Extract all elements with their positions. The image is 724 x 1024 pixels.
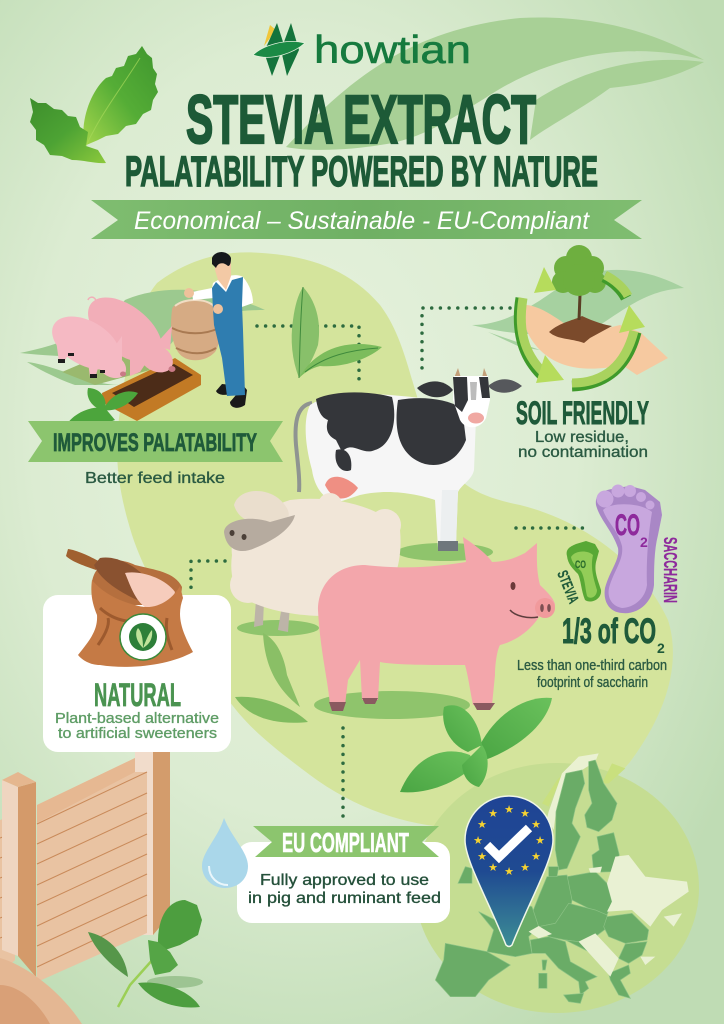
mound — [0, 958, 82, 1024]
ribbon: EU compliant — [253, 826, 439, 858]
sheep eyes — [230, 530, 247, 540]
stevia leaves top left — [30, 46, 158, 163]
sheep head — [224, 515, 295, 551]
text: natural: Plant-based alternative — [55, 710, 219, 727]
leaf behind hand — [472, 270, 684, 350]
trough — [102, 358, 201, 421]
heading: natural: NATURAL — [94, 677, 181, 713]
large footprint: saccharin: CO — [615, 509, 640, 542]
text: EU compliant — [248, 872, 441, 907]
cow udder — [325, 477, 358, 499]
eu stars: ★ — [473, 834, 483, 847]
text: soil friendly: Low residue, — [535, 429, 629, 446]
dotted connector: pig to EU compliant — [341, 728, 345, 818]
dotted connector: natural to sheep — [191, 561, 225, 590]
pig hooves — [329, 698, 495, 711]
cow front leg — [440, 490, 458, 547]
text: soil friendly: no contamination — [518, 444, 648, 461]
ground shadow: cow — [397, 543, 493, 561]
ribbon: tagline: Economical – Sustainable - EU-Compliant — [134, 207, 590, 235]
text: EU compliant: Fully approved to use — [260, 872, 429, 889]
text: better feed intake: Better feed intake — [85, 470, 225, 487]
pig large — [76, 285, 178, 378]
sheep body — [230, 493, 401, 616]
text: carbon footprint: Less than one-third carbon — [517, 658, 667, 674]
ribbon: improves palatability: IMPROVES PALATABILITY — [53, 429, 257, 457]
ground under pigs — [62, 345, 150, 385]
sack back rim — [92, 560, 182, 605]
cow body — [306, 394, 476, 548]
plank lines — [0, 772, 147, 967]
text: natural — [55, 710, 219, 742]
ribbon: EU compliant: EU COMPLIANT — [282, 827, 409, 858]
sheep wool cap — [234, 491, 289, 523]
mint leaves — [400, 698, 552, 792]
planks — [37, 758, 147, 982]
leaves near sheep — [235, 633, 308, 723]
natural badge — [120, 614, 166, 660]
map pin — [465, 796, 553, 946]
pig eye — [510, 582, 516, 590]
eu stars: ★ — [531, 850, 541, 863]
farmer and pigs illustration — [43, 252, 253, 429]
pin shape — [465, 796, 553, 946]
logo icon — [253, 23, 305, 76]
eu stars: ★ — [520, 861, 530, 874]
label: saccharin: SACCHARIN — [660, 537, 680, 603]
sack illustration — [66, 549, 193, 667]
leaves near cow — [292, 287, 382, 378]
map circle — [415, 763, 699, 1013]
eu stars: ★ — [504, 865, 514, 878]
left planks — [0, 815, 15, 975]
pig small — [43, 305, 130, 383]
tree — [552, 245, 606, 320]
large footprint: saccharin: 2 — [640, 534, 648, 550]
light wedge above sweden — [542, 763, 625, 807]
leaf behind pigs — [20, 290, 265, 385]
text: carbon footprint: footprint of saccharin — [537, 675, 648, 691]
text: EU compliant: in pig and ruminant feed — [248, 890, 441, 907]
text: carbon footprint — [517, 658, 667, 691]
basil leaves — [65, 388, 138, 429]
recycling arrows — [519, 277, 636, 386]
hand — [523, 305, 668, 375]
card: EU compliant — [237, 826, 450, 923]
sheep — [224, 491, 401, 632]
big pig — [318, 537, 555, 711]
eu stars: ★ — [504, 803, 514, 816]
back post — [135, 752, 153, 935]
logo wordmark: howtian — [314, 29, 471, 72]
eu stars: ★ — [477, 818, 487, 831]
decorative large leaf behind title — [286, 18, 704, 150]
pig body — [318, 537, 555, 705]
soil friendly icon — [472, 245, 684, 386]
label: stevia: STEVIA — [553, 568, 582, 606]
check mark — [487, 828, 529, 857]
member states — [435, 760, 649, 1003]
water drop — [202, 818, 248, 888]
ground shadow: pig — [314, 691, 470, 719]
title — [125, 81, 598, 196]
eu stars — [473, 803, 545, 878]
logo — [253, 23, 471, 76]
scoop bowl — [94, 557, 146, 600]
cow tail — [296, 403, 312, 492]
text: natural: to artificial sweeteners — [58, 725, 217, 742]
soil — [549, 316, 612, 343]
heading: 1/3 of CO2: 2 — [657, 640, 665, 656]
small footprint: stevia: CO — [575, 559, 586, 571]
text: soil friendly — [518, 429, 648, 461]
carbon footprints — [553, 484, 680, 613]
heading: 1/3 of CO2: 1/3 of CO — [562, 612, 656, 651]
eu stars: ★ — [488, 807, 498, 820]
farmer — [184, 252, 253, 408]
dotted connector: soil friendly to cow — [422, 308, 510, 369]
pig smile — [510, 610, 538, 618]
eu stars: ★ — [531, 818, 541, 831]
cow patches — [316, 392, 466, 471]
ribbon: improves palatability — [28, 421, 283, 462]
cow head — [417, 368, 522, 427]
wooden fence — [0, 752, 170, 1024]
eu stars: ★ — [488, 861, 498, 874]
cow — [296, 368, 522, 551]
dotted connector: palatability to cow — [257, 326, 359, 384]
eu stars: ★ — [535, 834, 545, 847]
eu stars: ★ — [520, 807, 530, 820]
sheep legs — [254, 600, 290, 632]
non-member states — [529, 855, 689, 977]
heading: 1/3 of CO2 — [562, 612, 665, 656]
sack — [78, 580, 193, 667]
norway — [547, 753, 599, 830]
europe map — [435, 753, 689, 1003]
grain — [125, 572, 175, 608]
ground shadow: sheep — [237, 620, 319, 636]
ribbon: tagline — [91, 200, 642, 239]
dotted connector: footprint to pig — [516, 526, 590, 530]
eu stars: ★ — [477, 850, 487, 863]
barrel — [171, 300, 220, 360]
scoop handle — [66, 549, 100, 570]
front post — [2, 780, 18, 956]
large footprint: saccharin — [596, 484, 662, 613]
green central blob — [117, 252, 673, 828]
stevia sprig — [88, 900, 203, 1008]
card: natural — [43, 549, 231, 752]
sack folds — [98, 608, 172, 650]
pig snout — [535, 598, 555, 618]
